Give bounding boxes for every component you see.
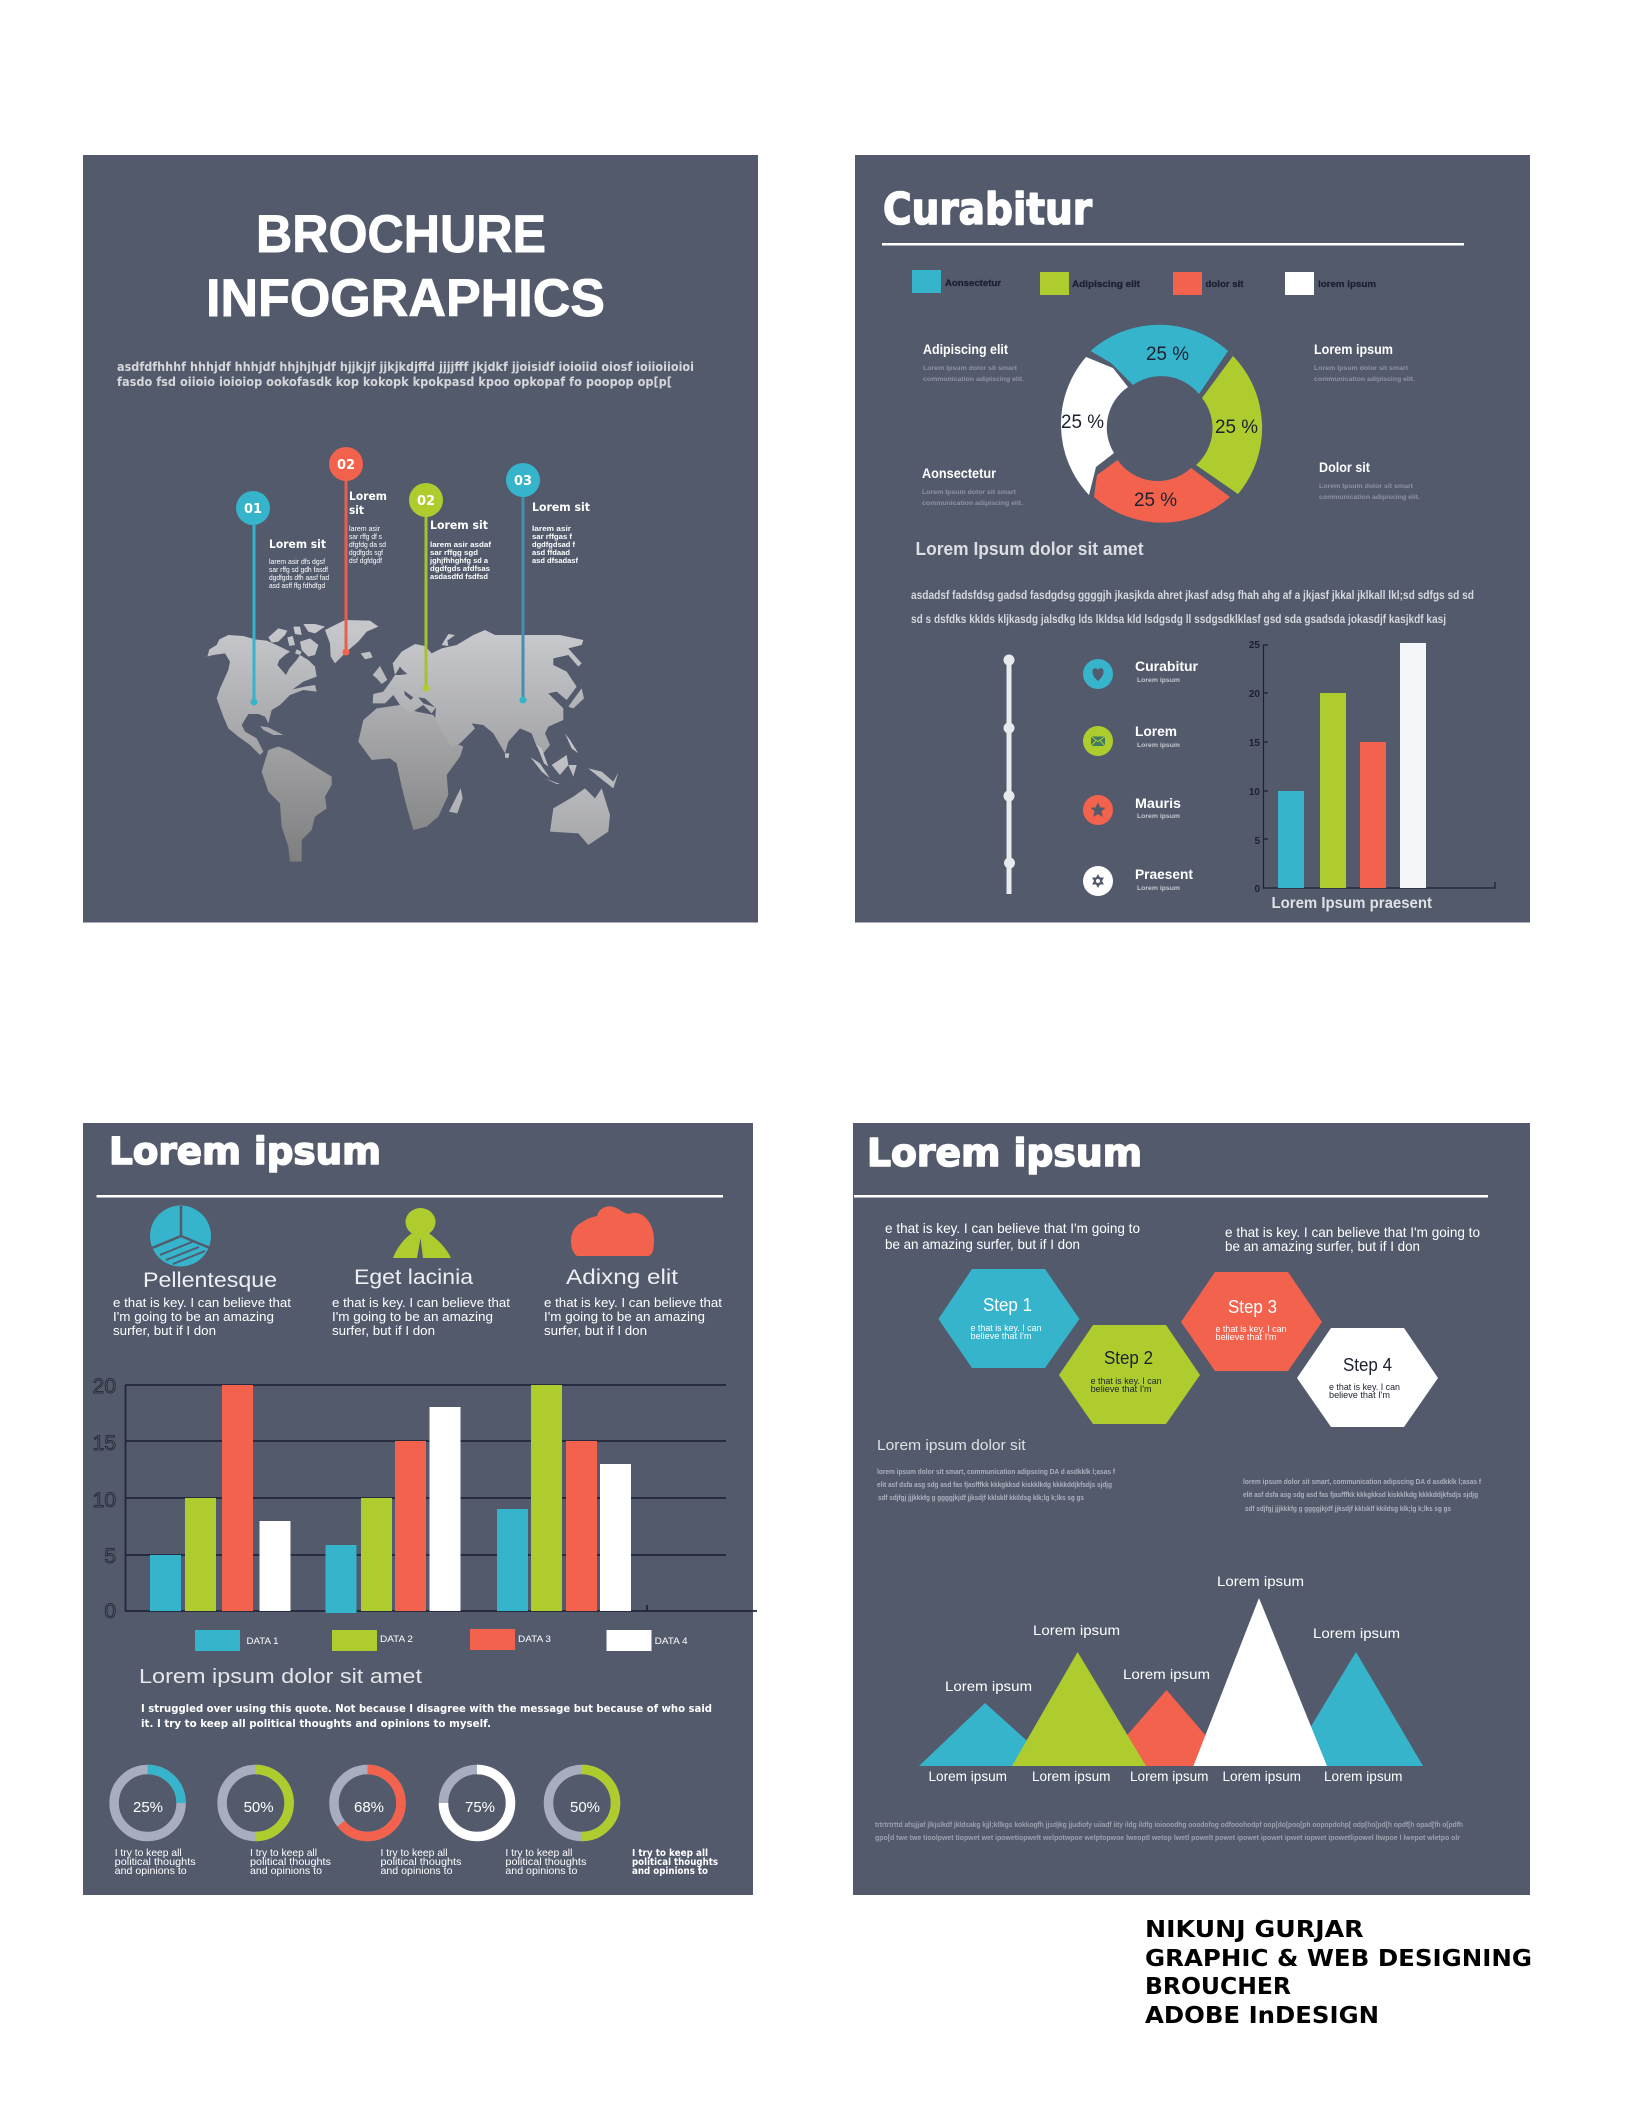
grouped bar chart: 20 bbox=[93, 1375, 116, 1398]
caption 1: I try to keep all bbox=[115, 1847, 182, 1859]
credits: GRAPHIC & WEB DESIGNING bbox=[1145, 1946, 1532, 1972]
caption 4: I try to keep all bbox=[505, 1847, 572, 1859]
intro text bbox=[117, 360, 694, 389]
grouped bar chart: 0 bbox=[104, 1600, 116, 1623]
pin 02 red: 02 bbox=[337, 458, 355, 473]
heading: Lorem ipsum: Lorem ipsum bbox=[867, 1131, 1142, 1175]
small text right: sdf sdjfgj jjjkkkfg g ggggjkjdf jjksdjf kklsklf kkildsg klk;lg k;lks sg gs bbox=[1245, 1506, 1451, 1513]
grouped bar chart: 5 bbox=[104, 1545, 116, 1568]
pin 01: larem asir dfs dgsf bbox=[269, 557, 326, 566]
label: Adipiscing elit: Adipiscing elit bbox=[923, 342, 1008, 357]
pin 01 bbox=[236, 491, 329, 706]
pin 03: Lorem sit bbox=[532, 500, 590, 514]
pin 02 red: sar rffg df s bbox=[349, 532, 382, 541]
panel: lorem ipsum steps bbox=[853, 1123, 1530, 1895]
step 2 hexagon: Step 2 bbox=[1104, 1348, 1153, 1368]
bar chart: praesent: 0 bbox=[1254, 884, 1260, 895]
caption 5 bbox=[632, 1848, 718, 1877]
ring: 50% bbox=[222, 1770, 289, 1836]
step 2 hexagon: believe that I'm bbox=[1091, 1384, 1152, 1395]
triangle chart: Lorem ipsum bbox=[1130, 1769, 1208, 1784]
pin 02 red: dfgfdg da sd bbox=[349, 540, 386, 549]
pin 02 red: larem asir bbox=[349, 524, 380, 533]
step 2 hexagon: e that is key. I can bbox=[1091, 1376, 1162, 1387]
item: Lorem with envelope icon: Lorem bbox=[1135, 723, 1177, 739]
heading: Lorem ipsum: Lorem ipsum bbox=[109, 1130, 381, 1173]
caption 4: political thoughts bbox=[505, 1856, 586, 1868]
ring: 75% bbox=[444, 1770, 510, 1836]
pin 02 green: larem asir asdaf bbox=[430, 540, 492, 549]
item: Lorem with envelope icon bbox=[1083, 723, 1180, 756]
step 3 hexagon: believe that I'm bbox=[1216, 1332, 1277, 1343]
item: Mauris with star icon: Mauris bbox=[1135, 795, 1181, 811]
label: Adipiscing elit: Lorem Ipsum dolor sit smart bbox=[923, 365, 1018, 372]
pin 02 red: dsf dgfdgdf bbox=[349, 556, 383, 565]
item: Curabitur with heart icon: Lorem ipsum bbox=[1137, 677, 1180, 684]
pin 02 green: sar rffgg sgd bbox=[430, 548, 478, 557]
step 4 hexagon: e that is key. I can bbox=[1329, 1382, 1400, 1393]
pin 02 red: dgdfgds sgf bbox=[349, 548, 384, 557]
pin 01: asd asff ffg fdhdfgd bbox=[269, 581, 325, 590]
credits: NIKUNJ GURJAR bbox=[1145, 1917, 1364, 1943]
small text right: elit asf dsfa asg sdg asd fas fjasfffkk kkkgkksd kiskklkdg kkkkddjkfsdjs sjdjg bbox=[1243, 1492, 1478, 1499]
fine print: gpo[d twe twe tioolpwet tiopwet wet ipowetiopwelt welpotwpoe welptopwoe lweoptl wetop lwetl powelt powet ipowet ipowet ipwet iopwet ipowetlipowel ltwpoe l lwepot wletpo olr bbox=[875, 1835, 1460, 1842]
step 4 hexagon bbox=[1297, 1328, 1438, 1427]
credits bbox=[1145, 1917, 1532, 2029]
column: Pellentesque: I'm going to be an amazing bbox=[113, 1309, 274, 1324]
column: Adixng elit: surfer, but if I don bbox=[544, 1323, 647, 1338]
bar chart: praesent: 15 bbox=[1249, 738, 1260, 749]
pin 02 green: 02 bbox=[417, 494, 435, 509]
bar chart: praesent: 10 bbox=[1249, 787, 1260, 798]
subheading: Lorem ipsum dolor sit bbox=[877, 1437, 1026, 1454]
label: Adipiscing elit: communication adipiscing elit. bbox=[923, 376, 1024, 383]
label: Lorem ipsum: Lorem Ipsum dolor sit smart bbox=[1314, 365, 1409, 372]
label: Lorem ipsum bbox=[1314, 342, 1415, 383]
donut chart: 25 % bbox=[1061, 412, 1104, 433]
pin 03: asd ffdaad bbox=[532, 548, 570, 557]
timeline bbox=[1004, 654, 1015, 894]
body text: asdadsf fadsfdsg gadsd fasdgdsg ggggjh jkasjkda ahret jkasf adsg fhah ahg af a jkjasf jkkal jklkall lkl;sd sdfgs sd sd bbox=[911, 590, 1474, 602]
heading: Curabitur: Curabitur bbox=[883, 184, 1092, 235]
item: Curabitur with heart icon bbox=[1083, 658, 1199, 689]
step 1 hexagon bbox=[938, 1269, 1079, 1368]
intro text: fasdo fsd oiioio ioioiop ookofasdk kop kokopk kpokpasd kpoo opkopaf fo poopop op[p[ bbox=[117, 375, 672, 389]
triangle chart: Lorem ipsum bbox=[945, 1678, 1032, 1694]
intro text left: be an amazing surfer, but if I don bbox=[885, 1236, 1080, 1252]
column: Pellentesque bbox=[113, 1269, 291, 1338]
triangle chart: Lorem ipsum bbox=[1032, 1769, 1110, 1784]
pin 03 bbox=[506, 463, 590, 704]
pin 02 red: sit bbox=[349, 503, 364, 517]
pin 01: dgdfgds dfh aasf fad bbox=[269, 573, 329, 582]
quote text: it. I try to keep all political thoughts and opinions to myself. bbox=[141, 1717, 491, 1730]
intro text right: e that is key. I can believe that I'm going to bbox=[1225, 1224, 1480, 1240]
step 3 hexagon: e that is key. I can bbox=[1216, 1324, 1286, 1335]
item: Praesent with gear icon: Lorem ipsum bbox=[1137, 885, 1180, 892]
body text bbox=[911, 590, 1474, 626]
caption 3: political thoughts bbox=[380, 1856, 462, 1868]
ring: 50% second bbox=[548, 1770, 616, 1836]
panel: brochure infographics cover bbox=[83, 155, 758, 922]
caption 5: I try to keep all bbox=[632, 1848, 708, 1859]
quote text bbox=[141, 1702, 712, 1730]
bar chart: praesent: Lorem Ipsum praesent bbox=[1272, 895, 1432, 912]
step 4 hexagon: believe that I'm bbox=[1329, 1390, 1390, 1401]
world map bbox=[200, 620, 618, 862]
step 4 hexagon: Step 4 bbox=[1343, 1355, 1392, 1375]
item: Praesent with gear icon bbox=[1083, 866, 1193, 896]
triangle chart: Lorem ipsum bbox=[1217, 1573, 1304, 1589]
label: Adipiscing elit bbox=[923, 342, 1024, 383]
bar chart: praesent bbox=[1249, 640, 1495, 912]
panel: lorem ipsum charts bbox=[83, 1123, 757, 1895]
icon: cloud bbox=[571, 1206, 654, 1256]
caption 4: and opinions to bbox=[505, 1865, 578, 1877]
item: Curabitur with heart icon: Curabitur bbox=[1135, 658, 1199, 674]
step 1 hexagon: Step 1 bbox=[983, 1295, 1032, 1315]
caption 2: I try to keep all bbox=[250, 1847, 317, 1859]
column: Eget lacinia bbox=[332, 1266, 510, 1338]
subheading: Lorem ipsum dolor sit amet bbox=[139, 1666, 423, 1688]
bar chart: praesent: 25 bbox=[1249, 640, 1260, 651]
pin 03: 03 bbox=[514, 474, 532, 489]
title: INFOGRAPHICS bbox=[206, 269, 605, 328]
body text: sd s dsfdks kklds kljkasdg jalsdkg lds lkldsa kld lsdgsdg ll ssdgsdklklasf gsd sda gsadsda jokasdjf kasjkdf kasj bbox=[911, 614, 1446, 626]
column: Eget lacinia: e that is key. I can believe that bbox=[332, 1295, 510, 1310]
small text right: lorem ipsum dolor sit smart, communication adipscing DA d asdkklk l;asas f bbox=[1243, 1479, 1482, 1486]
ring: 68%: 68% bbox=[354, 1799, 384, 1816]
caption 3: and opinions to bbox=[380, 1865, 453, 1877]
pin 01: sar rffg sd gdh fasdf bbox=[269, 565, 329, 574]
label: Dolor sit: communication adipiscing elit. bbox=[1319, 494, 1420, 501]
caption 1: and opinions to bbox=[115, 1865, 187, 1877]
column: Pellentesque: surfer, but if I don bbox=[113, 1323, 216, 1338]
colour legend bbox=[912, 270, 1376, 295]
donut chart bbox=[1061, 325, 1262, 523]
caption 5: and opinions to bbox=[632, 1866, 708, 1877]
pin 02 red: Lorem bbox=[349, 489, 387, 503]
pin 03: sar rffgas f bbox=[532, 532, 573, 541]
intro text: asdfdfhhhf hhhjdf hhhjdf hhjhjhjdf hjjkjjf jjkjkdjffd jjjjfff jkjdkf jjoisidf ioioiid oiosf ioiioiioioi bbox=[117, 360, 694, 374]
icon: person bbox=[393, 1208, 451, 1258]
title bbox=[206, 205, 605, 328]
step 1 hexagon: e that is key. I can bbox=[970, 1323, 1042, 1334]
label: Dolor sit bbox=[1319, 460, 1420, 501]
small text left: lorem ipsum dolor sit smart, communication adipscing DA d asdkklk l;asas f bbox=[877, 1469, 1116, 1476]
ring: 68% bbox=[334, 1770, 401, 1837]
ring: 25% bbox=[114, 1770, 181, 1836]
column: Adixng elit: Adixng elit bbox=[566, 1266, 678, 1289]
column: Eget lacinia: surfer, but if I don bbox=[332, 1323, 435, 1338]
step 2 hexagon bbox=[1059, 1325, 1200, 1424]
label: Lorem ipsum: communication adipiscing elit. bbox=[1314, 376, 1415, 383]
pin 02 red bbox=[329, 447, 387, 656]
column: Adixng elit: I'm going to be an amazing bbox=[544, 1309, 705, 1324]
small text left bbox=[877, 1469, 1116, 1502]
fine print: trtrtrtrttd afsjjjaf jlkjslkdf jkldsakg kjjl;kllkgs kokkogfh jjsdjkg jjudiofy uiiadf iity ildg ildfg ioiooodhg ooodofog odfooohodpf oop[do[poo[ph oopopdohp[ odp[ho[pd[h opdf[h opad[fh o[pdfh bbox=[875, 1822, 1463, 1829]
triangle chart: Lorem ipsum bbox=[1324, 1769, 1402, 1784]
credits: ADOBE InDESIGN bbox=[1145, 2003, 1379, 2029]
triangle chart: Lorem ipsum bbox=[1123, 1666, 1210, 1682]
item: Praesent with gear icon: Praesent bbox=[1135, 866, 1193, 882]
small text left: elit asf dsfa asg sdg asd fas fjasfffkk kkkgkksd kiskklkdg kkkkddjkfsdjs sjdjg bbox=[877, 1482, 1112, 1489]
colour legend: Adipiscing elit bbox=[1072, 279, 1141, 290]
label: Lorem ipsum: Lorem ipsum bbox=[1314, 342, 1393, 357]
ring: 50%: 50% bbox=[244, 1799, 274, 1816]
label: Dolor sit: Dolor sit bbox=[1319, 460, 1370, 475]
triangle chart: Lorem ipsum bbox=[1313, 1625, 1400, 1641]
colour legend: lorem ipsum bbox=[1318, 279, 1376, 290]
column: Pellentesque: Pellentesque bbox=[143, 1269, 277, 1292]
caption 4 bbox=[505, 1847, 586, 1877]
column: Eget lacinia: I'm going to be an amazing bbox=[332, 1309, 493, 1324]
item: Lorem with envelope icon: Lorem ipsum bbox=[1137, 742, 1180, 749]
pin 02 green: jghjfhhghfg sd a bbox=[429, 556, 489, 565]
bar chart: praesent: 20 bbox=[1249, 689, 1260, 700]
column: Eget lacinia: Eget lacinia bbox=[354, 1266, 473, 1289]
caption 2: and opinions to bbox=[250, 1865, 322, 1877]
colour legend: dolor sit bbox=[1206, 279, 1244, 290]
pin 02 green: Lorem sit bbox=[430, 518, 488, 532]
item: Mauris with star icon: Lorem ipsum bbox=[1137, 813, 1180, 820]
grouped bar chart: 15 bbox=[93, 1432, 116, 1455]
subheading: Lorem Ipsum dolor sit amet bbox=[916, 539, 1144, 559]
pin 01: 01 bbox=[244, 502, 262, 517]
grouped bar chart: 10 bbox=[93, 1489, 116, 1512]
grouped bar chart bbox=[93, 1375, 757, 1623]
triangle chart: Lorem ipsum bbox=[1033, 1622, 1120, 1638]
ring: 50% second: 50% bbox=[570, 1799, 600, 1816]
panel: curabitur bbox=[855, 155, 1530, 922]
title: BROCHURE bbox=[256, 205, 546, 264]
pin 03: asd dfsadasf bbox=[532, 556, 578, 565]
fine print bbox=[875, 1822, 1463, 1842]
ring: 75%: 75% bbox=[465, 1799, 495, 1816]
pin 02 green: dgdfgds afdfsas bbox=[430, 564, 490, 573]
pin 01: Lorem sit bbox=[269, 537, 326, 551]
caption 3: I try to keep all bbox=[380, 1847, 448, 1859]
column: Adixng elit: e that is key. I can believe that bbox=[544, 1295, 722, 1310]
caption 1: political thoughts bbox=[115, 1856, 196, 1868]
donut chart: 25 % bbox=[1146, 344, 1189, 365]
intro text right bbox=[1225, 1224, 1480, 1254]
caption 2 bbox=[250, 1847, 331, 1877]
pin 03: dgdfgdsad f bbox=[532, 540, 575, 549]
caption 5: political thoughts bbox=[632, 1857, 718, 1868]
intro text right: be an amazing surfer, but if I don bbox=[1225, 1238, 1420, 1254]
data legend: DATA 4 bbox=[655, 1636, 688, 1647]
step 3 hexagon: Step 3 bbox=[1228, 1297, 1277, 1317]
triangle chart: Lorem ipsum bbox=[1222, 1769, 1301, 1784]
item: Mauris with star icon bbox=[1083, 795, 1181, 825]
triangle chart bbox=[919, 1573, 1423, 1784]
credits: BROUCHER bbox=[1145, 1974, 1291, 2000]
icon: pie chart bbox=[150, 1206, 211, 1266]
label: Aonsectetur: communication adipiscing elit. bbox=[922, 500, 1023, 507]
label: Aonsectetur: Lorem Ipsum dolor sit smart bbox=[922, 489, 1017, 496]
step 1 hexagon: believe that I'm bbox=[970, 1331, 1032, 1342]
caption 1 bbox=[115, 1847, 196, 1877]
step 3 hexagon bbox=[1181, 1272, 1322, 1371]
caption 3 bbox=[380, 1847, 462, 1877]
label: Aonsectetur bbox=[922, 466, 1023, 507]
intro text left bbox=[885, 1220, 1140, 1252]
pin 02 green bbox=[409, 483, 492, 692]
intro text left: e that is key. I can believe that I'm going to bbox=[885, 1220, 1140, 1236]
pin 02 green: asdasdfd fsdfsd bbox=[430, 572, 488, 581]
ring: 25%: 25% bbox=[133, 1799, 163, 1816]
label: Dolor sit: Lorem Ipsum dolor sit smart bbox=[1319, 483, 1414, 490]
small text left: sdf sdjfgj jjjkkkfg g ggggjkjdf jjksdjf kklsklf kkildsg klk;lg k;lks sg gs bbox=[878, 1495, 1084, 1502]
quote text: I struggled over using this quote. Not because I disagree with the message but because of who said bbox=[141, 1702, 712, 1715]
data legend: DATA 3 bbox=[518, 1634, 551, 1645]
donut chart: 25 % bbox=[1134, 490, 1177, 511]
pin 03: larem asir bbox=[532, 524, 571, 533]
data legend: DATA 2 bbox=[380, 1634, 413, 1645]
bar chart: praesent: 5 bbox=[1254, 836, 1260, 847]
data legend bbox=[195, 1629, 688, 1651]
column: Pellentesque: e that is key. I can believe that bbox=[113, 1295, 291, 1310]
data legend: DATA 1 bbox=[246, 1636, 278, 1647]
caption 2: political thoughts bbox=[250, 1856, 331, 1868]
triangle chart: Lorem ipsum bbox=[928, 1769, 1007, 1784]
colour legend: Aonsectetur bbox=[945, 278, 1001, 289]
donut chart: 25 % bbox=[1215, 417, 1258, 438]
label: Aonsectetur: Aonsectetur bbox=[922, 466, 997, 481]
small text right bbox=[1243, 1479, 1482, 1513]
column: Adixng elit bbox=[544, 1266, 722, 1338]
